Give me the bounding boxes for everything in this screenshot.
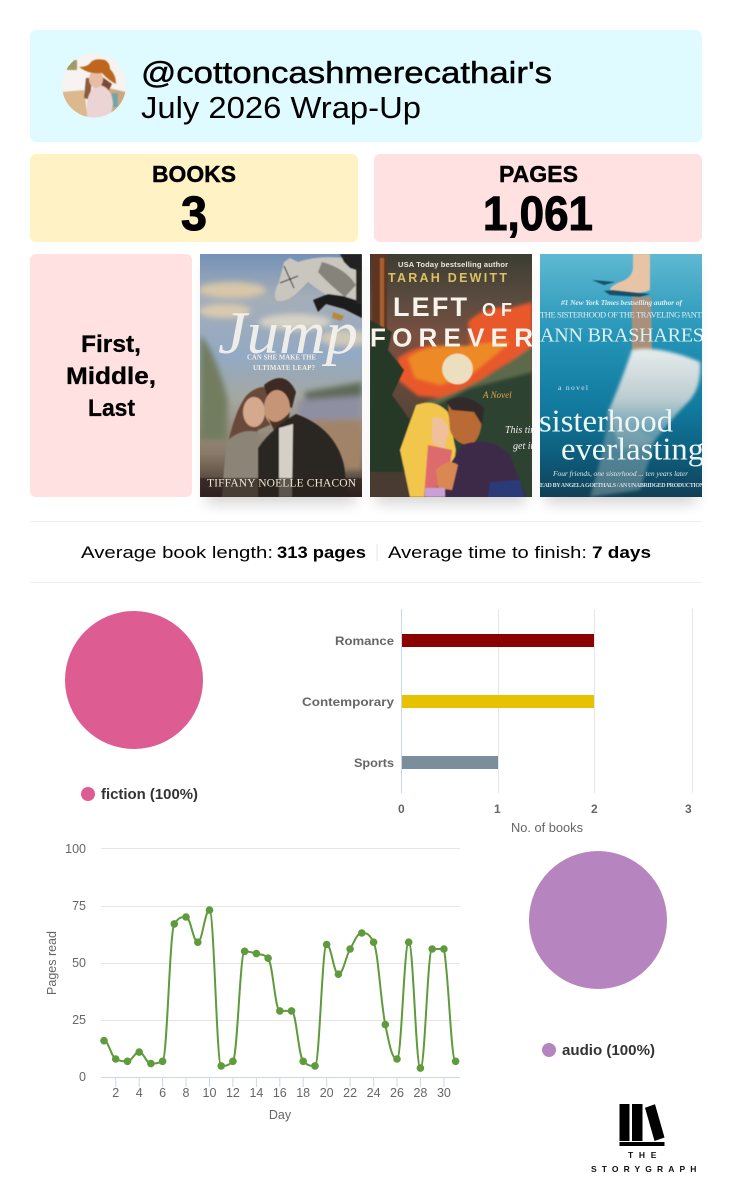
bar chart: genres: 2 [591, 802, 598, 816]
avatar [62, 53, 126, 120]
stat card: pages [374, 154, 702, 242]
line chart: pages read per day: 14 [249, 1086, 263, 1100]
couple [400, 403, 456, 497]
book cover: Sisterhood Everlasting: Four friends, one sisterhood ... ten years later [552, 469, 688, 478]
book cover: Left of Forever: A Novel [482, 390, 512, 400]
panel: first, middle, last: Last [88, 395, 135, 422]
logo: The StoryGraph: THE [628, 1150, 662, 1160]
line chart: pages read per day: Pages read [45, 931, 59, 995]
bar chart: genres [302, 609, 692, 835]
panel: first, middle, last: First, [81, 331, 141, 358]
pie chart: audio: audio (100%) [562, 1043, 655, 1059]
stat card: books: 3 [181, 188, 207, 241]
panel: first, middle, last: Middle, [66, 363, 156, 390]
book cover: Jump: ULTIMATE LEAP? [253, 365, 315, 372]
line chart: pages read per day [45, 842, 460, 1122]
book cover: Left of Forever: LEFT [393, 292, 468, 322]
book cover: Sisterhood Everlasting: a novel [558, 383, 588, 392]
line chart: pages read per day: 20 [320, 1086, 334, 1100]
bar chart: genres: Romance [335, 634, 394, 648]
bar chart: genres: 1 [494, 802, 501, 816]
couple [228, 386, 271, 440]
book cover: Left of Forever: This time [505, 425, 543, 436]
header panel [30, 30, 702, 142]
bar chart: genres: 0 [398, 802, 405, 816]
stat card: books: BOOKS [152, 161, 236, 187]
book cover: Sisterhood Everlasting: THE SISTERHOOD OF THE TRAVELING PANTS [540, 310, 706, 320]
book cover: Left of Forever: OF [482, 300, 512, 320]
pie chart: fiction [65, 611, 203, 803]
bar chart: genres: Contemporary [302, 695, 394, 709]
line chart: pages read per day: 28 [413, 1086, 427, 1100]
line chart: pages read per day: 8 [183, 1086, 190, 1100]
horse [274, 256, 357, 302]
stat card: books [30, 154, 358, 242]
book cover: Left of Forever: FOREVER [370, 322, 533, 352]
stats row: 7 days [592, 543, 651, 562]
book cover: Sisterhood Everlasting: ANN BRASHARES [540, 324, 704, 346]
book cover: Sisterhood Everlasting: everlasting [561, 430, 704, 466]
book cover: Left of Forever: get it [513, 441, 533, 452]
line chart: pages read per day: 50 [72, 956, 86, 970]
bar chart: genres: No. of books [511, 821, 583, 835]
stats row: Average book length: [81, 543, 273, 562]
line chart: pages read per day: 26 [390, 1086, 404, 1100]
line chart: pages read per day: 100 [65, 842, 86, 856]
line chart: pages read per day: 16 [273, 1086, 287, 1100]
line chart: pages read per day: 75 [72, 899, 86, 913]
line chart: pages read per day: 24 [367, 1086, 381, 1100]
book cover: Left of Forever: TARAH DEWITT [388, 271, 507, 285]
line chart: pages read per day: 22 [343, 1086, 357, 1100]
book cover: Jump: CAN SHE MAKE THE [247, 354, 316, 362]
book cover: Sisterhood Everlasting: sisterhood [539, 402, 673, 438]
logo: The StoryGraph [591, 1104, 702, 1174]
book cover: Left of Forever [370, 254, 543, 504]
bar chart: genres: Sports [354, 756, 394, 770]
subtitle: July 2026 Wrap-Up [141, 90, 421, 125]
pie chart: audio [529, 851, 667, 1059]
cover text: Jump [218, 300, 358, 366]
panel: first, middle, last [30, 254, 192, 497]
bar chart: genres: 3 [685, 802, 692, 816]
line chart: pages read per day: 6 [159, 1086, 166, 1100]
book cover: Jump: TIFFANY NOELLE CHACON [207, 478, 357, 490]
stat card: pages: 1,061 [483, 188, 593, 241]
line chart: pages read per day: 2 [112, 1086, 119, 1100]
line chart: pages read per day: 4 [136, 1086, 143, 1100]
logo: The StoryGraph: STORYGRAPH [591, 1164, 702, 1174]
stats row: 313 pages [277, 543, 366, 562]
line chart: pages read per day: 0 [79, 1070, 86, 1084]
book cover: Jump [198, 254, 371, 504]
line chart: pages read per day: 30 [437, 1086, 451, 1100]
line chart: pages read per day: Day [269, 1108, 292, 1122]
stat card: pages: PAGES [499, 161, 578, 187]
book cover: Sisterhood Everlasting: READ BY ANGELA GOETHALS / AN UNABRIDGED PRODUCTION [536, 483, 705, 489]
username: @cottoncashmerecathair's [141, 55, 552, 90]
cover text: USA Today bestselling author [398, 260, 508, 269]
stats row: Average time to finish: [388, 543, 587, 562]
cover text: #1 New York Times bestselling author of [560, 298, 684, 307]
pie chart: fiction: fiction (100%) [101, 787, 198, 803]
line chart: pages read per day: 25 [72, 1013, 86, 1027]
line chart: pages read per day: 10 [203, 1086, 216, 1100]
line chart: pages read per day: 12 [226, 1086, 240, 1100]
stats row [30, 522, 702, 582]
line chart: pages read per day: 18 [296, 1086, 310, 1100]
book cover: Sisterhood Everlasting [536, 254, 706, 504]
